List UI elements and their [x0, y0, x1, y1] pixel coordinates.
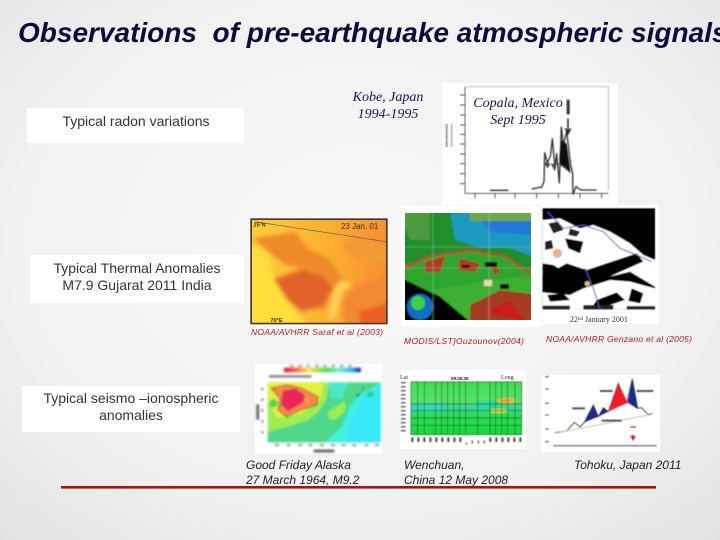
contour map: Good Friday Alaska	[255, 364, 382, 454]
caption: Kobe, Japan: Kobe, Japan	[352, 90, 423, 105]
map: black and white thermal anomaly, 22 January 2001: January 2001	[583, 315, 628, 324]
map: Gujarat thermal anomaly: 23 Jan. 01	[341, 222, 379, 231]
caption: Wenchuan event: China 12 May 2008	[404, 473, 508, 487]
caption: Copala, Mexico: Sept 1995	[490, 113, 546, 128]
chart: Copala radon time series	[442, 83, 618, 205]
label: typical radon variations: Typical radon variations	[62, 113, 210, 129]
source caption: Ouzounov: MODIS/LST]Ouzounov(2004)	[404, 336, 524, 346]
title: Observations of pre-earthquake atmospheric signals	[18, 17, 720, 48]
heat map: Wenchuan	[400, 370, 526, 449]
map: MODIS land surface temperature	[395, 205, 541, 330]
caption: Alaska event: 27 March 1964, M9.2	[245, 473, 360, 487]
caption: Wenchuan event	[404, 458, 508, 487]
label: typical seismo-ionospheric anomalies: Typical seismo –ionospheric	[43, 390, 219, 406]
caption: Kobe, Japan	[352, 90, 423, 122]
caption: Kobe, Japan: 1994-1995	[358, 107, 418, 122]
map: black and white thermal anomaly, 22 January 2001	[542, 205, 659, 324]
heat map: Wenchuan: Long	[501, 375, 514, 381]
red rule	[61, 486, 656, 489]
caption: Alaska event: Good Friday Alaska	[246, 458, 351, 472]
label: typical thermal anomalies: M7.9 Gujarat 2011 India	[62, 277, 212, 293]
caption: Tohoku event: Tohoku, Japan 2011	[574, 458, 681, 472]
caption: Alaska event	[245, 458, 360, 487]
label: typical seismo-ionospheric anomalies: anomalies	[99, 407, 163, 423]
map: black and white thermal anomaly, 22 January 2001: nd	[578, 317, 584, 322]
map: Gujarat thermal anomaly	[245, 212, 395, 328]
heat map: Wenchuan: 09.05.08	[451, 376, 469, 381]
map: Gujarat thermal anomaly: 70°E	[270, 318, 283, 324]
caption: Copala, Mexico	[473, 96, 563, 128]
chart: Tohoku thermal peaks	[541, 375, 660, 452]
source caption: Genzano: NOAA/AVHRR Genzano et al (2005)	[546, 334, 692, 344]
heat map: Wenchuan: Lat	[400, 375, 408, 381]
caption: Wenchuan event: Wenchuan,	[404, 458, 464, 472]
label: typical seismo-ionospheric anomalies	[22, 386, 240, 432]
caption: Copala, Mexico: Copala, Mexico	[473, 96, 563, 111]
label: typical thermal anomalies: Typical Thermal Anomalies	[53, 260, 221, 276]
map: Gujarat thermal anomaly: 25°N	[254, 223, 266, 229]
label: typical radon variations	[27, 108, 244, 143]
label: typical thermal anomalies	[30, 255, 244, 303]
source caption: Saraf: NOAA/AVHRR Saraf et al (2003)	[251, 327, 383, 337]
map: black and white thermal anomaly, 22 January 2001: 22	[570, 315, 578, 324]
